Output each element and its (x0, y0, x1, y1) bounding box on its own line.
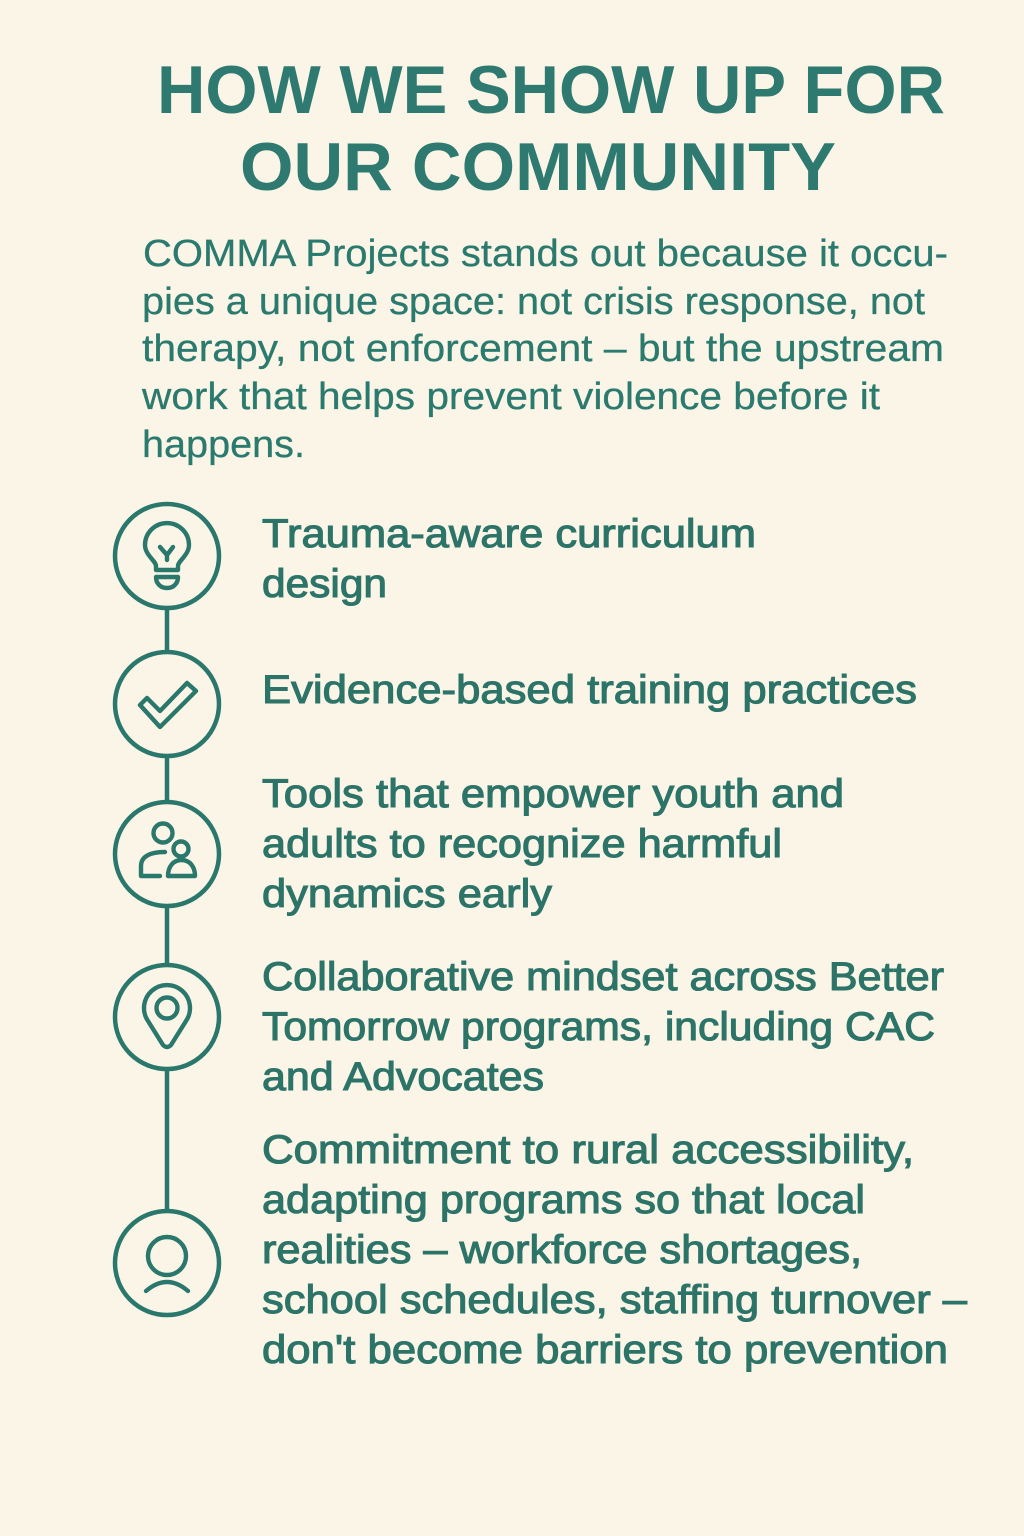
intro paragraph: COMMA Projects stands out because it occu- (143, 233, 948, 275)
item text: Commitment to rural accessibility, (262, 1128, 914, 1172)
item text: adapting programs so that local (262, 1178, 865, 1222)
item text (262, 1128, 968, 1372)
title: HOW WE SHOW UP FOR (157, 52, 945, 128)
item text (262, 955, 944, 1099)
intro paragraph: therapy, not enforcement – but the upstream (142, 328, 944, 370)
timeline item: tools (115, 772, 844, 916)
icon: location pin (115, 965, 219, 1069)
item text: dynamics early (262, 872, 552, 916)
icon: person (115, 1211, 219, 1315)
item text: Tools that empower youth and (262, 772, 844, 816)
icon: two people (115, 802, 219, 906)
intro paragraph (141, 233, 948, 466)
icon: check mark (115, 652, 219, 756)
timeline item: curriculum design (115, 504, 756, 608)
item text: school schedules, staffing turnover – (262, 1278, 968, 1322)
title: OUR COMMUNITY (240, 129, 836, 205)
item text: realities – workforce shortages, (262, 1228, 862, 1272)
timeline item: rural accessibility (115, 1128, 968, 1372)
item text: Trauma-aware curriculum (262, 512, 756, 556)
item text: don't become barriers to prevention (262, 1328, 948, 1372)
item text: adults to recognize harmful (262, 822, 782, 866)
item text: and Advocates (262, 1055, 544, 1099)
item text: Evidence-based training practices (262, 668, 917, 712)
item text: Tomorrow programs, including CAC (262, 1005, 935, 1049)
timeline connector (165, 600, 169, 1220)
intro paragraph: happens. (142, 424, 305, 466)
icon: light bulb (115, 504, 219, 608)
intro paragraph: work that helps prevent violence before it (141, 376, 880, 418)
title (157, 52, 945, 205)
timeline item: training practices (115, 652, 917, 756)
item text: design (262, 562, 387, 606)
timeline item: collaborative mindset (115, 955, 944, 1099)
item text (262, 512, 756, 606)
intro paragraph: pies a unique space: not crisis response, not (142, 281, 925, 323)
item text (262, 772, 844, 916)
item text: Collaborative mindset across Better (262, 955, 944, 999)
